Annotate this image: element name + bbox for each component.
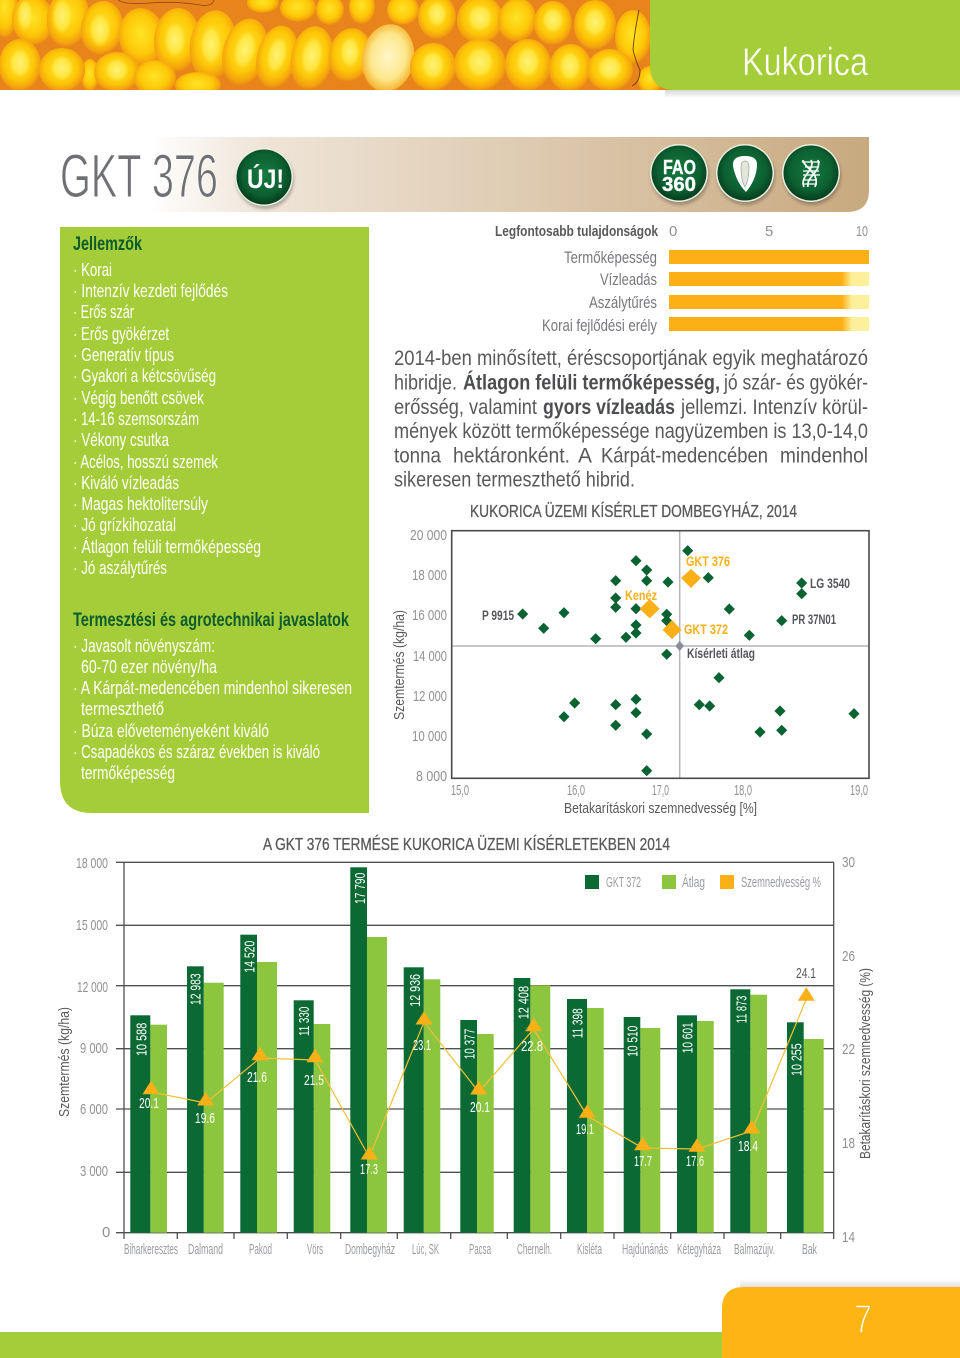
icon: ÚJ! badge xyxy=(235,148,294,209)
moisture value labels: 21.6 xyxy=(247,1069,267,1086)
reference hybrid labels: LG 3540 xyxy=(810,576,850,591)
y axis labels left: 12 000 xyxy=(77,979,108,996)
bar value labels: 10 255 xyxy=(789,1043,806,1076)
reference hybrid labels: PR 37N01 xyxy=(792,612,836,627)
list: recommendations: · A Kárpát-medencében mindenhol sikeresen xyxy=(73,677,352,698)
location labels: Chernelh. xyxy=(517,1241,552,1258)
list: characteristics: · Magas hektolitersúly xyxy=(73,493,209,514)
text block: hybrid description: hektáronként. xyxy=(453,444,570,468)
y axis labels left: 15 000 xyxy=(76,917,108,934)
moisture value labels: 21.5 xyxy=(304,1072,324,1089)
data points xyxy=(518,546,859,776)
left axis title: Szemtermés (kg/ha) xyxy=(56,1007,73,1117)
average bars xyxy=(150,937,824,1233)
bar value labels: 11 398 xyxy=(570,1008,587,1038)
y axis labels left: 3 000 xyxy=(80,1163,108,1180)
scatter y axis labels: 12 000 xyxy=(413,688,447,705)
property labels: Korai fejlődési erély xyxy=(542,316,657,335)
highlighted hybrids xyxy=(640,569,701,639)
text block: hybrid description: mindenhol xyxy=(780,444,868,468)
list: recommendations: · Csapadékos és száraz években is kiváló xyxy=(73,741,320,762)
list: characteristics: · Jó grízkihozatal xyxy=(73,514,176,535)
y axis labels right: 22 xyxy=(842,1041,855,1058)
text block: hybrid description: erősség, valamint xyxy=(394,396,537,419)
list: characteristics: · Erős gyökérzet xyxy=(73,323,169,344)
moisture value labels: 20.1 xyxy=(470,1099,490,1116)
highlighted hybrid labels xyxy=(625,553,730,637)
footer tab: page number xyxy=(722,1287,960,1358)
legend: Szemnedvesség % xyxy=(741,874,821,891)
list: characteristics: · Korai xyxy=(73,259,112,280)
moisture value labels: 24.1 xyxy=(796,965,816,982)
photo: corn kernels header band xyxy=(0,0,680,98)
heading: Jellemzők: Jellemzők xyxy=(73,233,142,255)
list: characteristics: · Intenzív kezdeti fejlődés xyxy=(73,280,228,301)
y axis labels left xyxy=(76,855,110,1241)
location labels: Balmazújv. xyxy=(734,1241,775,1258)
chart: GKT 376 yield in trials xyxy=(56,834,874,1258)
property labels xyxy=(542,248,657,335)
icon: FAO 360 badge xyxy=(650,144,709,205)
list: characteristics: · Végig benőtt csövek xyxy=(73,387,205,408)
location labels: Bak xyxy=(802,1241,817,1258)
header tab: Kukorica xyxy=(650,0,960,90)
panel: characteristics and agronomy recommendations xyxy=(60,227,369,813)
list: characteristics: · Acélos, hosszú szemek xyxy=(73,451,219,472)
moisture line xyxy=(151,999,806,1157)
moisture markers xyxy=(142,987,815,1160)
scatter y axis labels: 10 000 xyxy=(412,728,447,745)
bar value labels: 10 510 xyxy=(624,1026,641,1057)
list: characteristics: · Átlagon felüli termőképesség xyxy=(73,536,261,557)
location labels: Kétegyháza xyxy=(677,1241,721,1258)
footer green strip xyxy=(0,1332,722,1358)
highlighted hybrid labels: GKT 372 xyxy=(684,621,728,637)
location labels: Pacsa xyxy=(469,1241,491,1258)
scale labels: 0 xyxy=(669,223,677,240)
text block: hybrid description: gyors vízleadás xyxy=(543,396,675,419)
moisture value labels: 17.7 xyxy=(634,1153,652,1170)
y axis labels left: 9 000 xyxy=(80,1040,108,1057)
list: characteristics: · Kiváló vízleadás xyxy=(73,472,179,493)
legend xyxy=(585,874,821,891)
footer tab: page number: 7 xyxy=(854,1296,872,1342)
location labels: Biharkeresztes xyxy=(124,1241,178,1258)
property bars xyxy=(669,250,869,331)
icon: ÚJ! badge: ÚJ! xyxy=(247,163,284,194)
location labels xyxy=(124,1241,817,1258)
moisture value labels: 22.8 xyxy=(521,1038,543,1055)
list: characteristics: · Jó aszálytűrés xyxy=(73,557,167,578)
text block: hybrid description: jellemzi. Intenzív körül- xyxy=(680,396,868,419)
property labels: Vízleadás xyxy=(600,270,657,289)
moisture value labels: 18.4 xyxy=(738,1138,758,1155)
icon: DNA badge xyxy=(782,144,841,205)
moisture value labels: 17.6 xyxy=(686,1153,704,1170)
property labels: Termőképesség xyxy=(564,248,657,267)
text block: hybrid description: jó szár- és gyökér- xyxy=(723,372,868,394)
y axis labels right: 26 xyxy=(842,948,855,965)
scatter y axis labels: 16 000 xyxy=(412,607,447,624)
product title: GKT 376 xyxy=(60,142,218,210)
y axis labels right: 18 xyxy=(842,1135,855,1152)
bar value labels: 12 408 xyxy=(516,986,533,1019)
scatter title: KUKORICA ÜZEMI KÍSÉRLET DOMBEGYHÁZ, 2014 xyxy=(470,501,797,521)
text block: hybrid description: tonna xyxy=(394,444,441,468)
y axis labels left: 0 xyxy=(102,1224,110,1241)
moisture value labels xyxy=(139,965,816,1178)
location labels: Kisléta xyxy=(577,1241,602,1258)
list: recommendations: 60-70 ezer növény/ha xyxy=(81,656,218,677)
list: characteristics: · Gyakori a kétcsövűség xyxy=(73,365,216,386)
scatter y axis labels: 20 000 xyxy=(410,527,447,544)
text block: hybrid description: mények között termőképessége nagyüzemben is 13,0-14,0 xyxy=(394,420,868,443)
reference hybrid labels: Kísérleti átlag xyxy=(687,646,755,661)
list: recommendations: termőképesség xyxy=(81,762,175,783)
highlighted hybrid labels: GKT 376 xyxy=(686,553,730,569)
chart: scatter plot of yield vs moisture xyxy=(391,501,869,817)
list: characteristics: · Vékony csutka xyxy=(73,429,170,450)
highlighted hybrid labels: Kenéz xyxy=(625,587,657,603)
scale labels: 5 xyxy=(765,223,773,240)
right axis title: Betakarításkori szemnedvesség (%) xyxy=(857,968,874,1159)
scale labels: 10 xyxy=(856,223,868,240)
icon: FAO 360 badge: FAO xyxy=(663,157,696,179)
bar value labels: 12 983 xyxy=(188,973,205,1005)
bar value labels: 12 936 xyxy=(407,974,424,1007)
text block: hybrid description: hibridje. xyxy=(394,372,457,394)
footer tab shadow xyxy=(740,1279,960,1287)
list: recommendations: · Búza előveteményeként kiváló xyxy=(73,720,269,741)
reference hybrid labels: P 9915 xyxy=(482,608,514,623)
location labels: Vörs xyxy=(307,1241,323,1258)
scatter x axis labels: 16,0 xyxy=(567,782,585,799)
location labels: Pakod xyxy=(249,1241,272,1258)
icon: FAO 360 badge: 360 xyxy=(662,174,696,196)
list: recommendations: · Javasolt növényszám: xyxy=(73,635,215,656)
icon: corn seed badge xyxy=(716,144,775,205)
scatter y axis labels: 18 000 xyxy=(412,567,447,584)
heading: Legfontosabb tulajdonságok: Legfontosabb tulajdonságok xyxy=(495,224,659,240)
list: characteristics: · Erős szár xyxy=(73,301,134,322)
header shadow xyxy=(665,90,960,98)
moisture value labels: 17.3 xyxy=(360,1161,378,1178)
scatter x axis labels: 19,0 xyxy=(850,782,868,799)
text block: hybrid description: Kárpát-medencében xyxy=(601,444,768,468)
heading: Termesztési és agrotechnikai javaslatok: Termesztési és agrotechnikai javaslatok xyxy=(73,609,349,631)
list: characteristics xyxy=(73,259,261,578)
location labels: Dalmand xyxy=(188,1241,223,1258)
bar value labels xyxy=(134,873,806,1076)
text block: hybrid description xyxy=(394,347,868,492)
y axis labels left: 18 000 xyxy=(76,855,108,872)
location labels: Hajdúnánás xyxy=(622,1241,668,1258)
list: characteristics: · 14-16 szemsorszám xyxy=(73,408,199,429)
list: recommendations: termeszthető xyxy=(81,698,164,719)
y axis labels right: 14 xyxy=(842,1229,855,1246)
bar chart title: A GKT 376 TERMÉSE KUKORICA ÜZEMI KÍSÉRLETEKBEN 2014 xyxy=(263,834,670,854)
moisture value labels: 19.6 xyxy=(195,1110,215,1127)
bar value labels: 17 790 xyxy=(352,873,369,904)
moisture value labels: 20.1 xyxy=(139,1095,159,1112)
scatter x axis labels: 15,0 xyxy=(451,782,469,799)
moisture value labels: 23.1 xyxy=(413,1037,431,1054)
scatter y axis labels xyxy=(410,527,447,785)
scatter y axis title: Szemtermés (kg/ha) xyxy=(391,610,408,720)
location labels: Lúc, SK xyxy=(412,1241,439,1258)
scatter y axis labels: 8 000 xyxy=(416,768,447,785)
scatter x axis labels: 17,0 xyxy=(652,782,669,799)
plot frame and average crosshair xyxy=(452,531,869,778)
y axis labels left: 6 000 xyxy=(80,1101,108,1118)
scatter x axis title: Betakarításkori szemnedvesség [%] xyxy=(564,801,757,817)
y axis labels right: 30 xyxy=(842,854,855,871)
gradient product band xyxy=(150,137,869,212)
property labels: Aszálytűrés xyxy=(589,293,657,312)
y axis labels right xyxy=(842,854,855,1246)
bar value labels: 14 520 xyxy=(241,941,258,973)
text block: hybrid description: sikeresen termeszthető hibrid. xyxy=(394,468,635,492)
legend: GKT 372 xyxy=(606,874,641,891)
GKT 376 bars xyxy=(130,867,804,1233)
location labels: Dombegyház xyxy=(345,1241,395,1258)
text block: hybrid description: 2014-ben minősített, éréscsoportjának egyik meghatározó xyxy=(394,347,868,370)
bar value labels: 10 601 xyxy=(680,1022,697,1053)
chart: key properties xyxy=(495,223,869,335)
text block: hybrid description: A xyxy=(578,444,592,468)
text block: hybrid description: Átlagon felüli termőképesség, xyxy=(463,372,720,394)
reference hybrid labels xyxy=(482,576,850,661)
scatter x axis labels xyxy=(451,782,868,799)
scale labels xyxy=(669,223,868,240)
header tab: Kukorica: Kukorica xyxy=(742,41,868,84)
list: recommendations xyxy=(73,635,352,783)
scatter x axis labels: 18,0 xyxy=(734,782,752,799)
bar value labels: 10 377 xyxy=(461,1029,478,1059)
moisture value labels: 19.1 xyxy=(576,1121,594,1138)
scatter y axis labels: 14 000 xyxy=(413,648,447,665)
list: characteristics: · Generatív típus xyxy=(73,344,174,365)
bar value labels: 11 873 xyxy=(734,996,751,1023)
legend: Átlag xyxy=(682,874,705,891)
bar value labels: 11 330 xyxy=(296,1007,313,1036)
bar value labels: 10 588 xyxy=(134,1023,151,1056)
